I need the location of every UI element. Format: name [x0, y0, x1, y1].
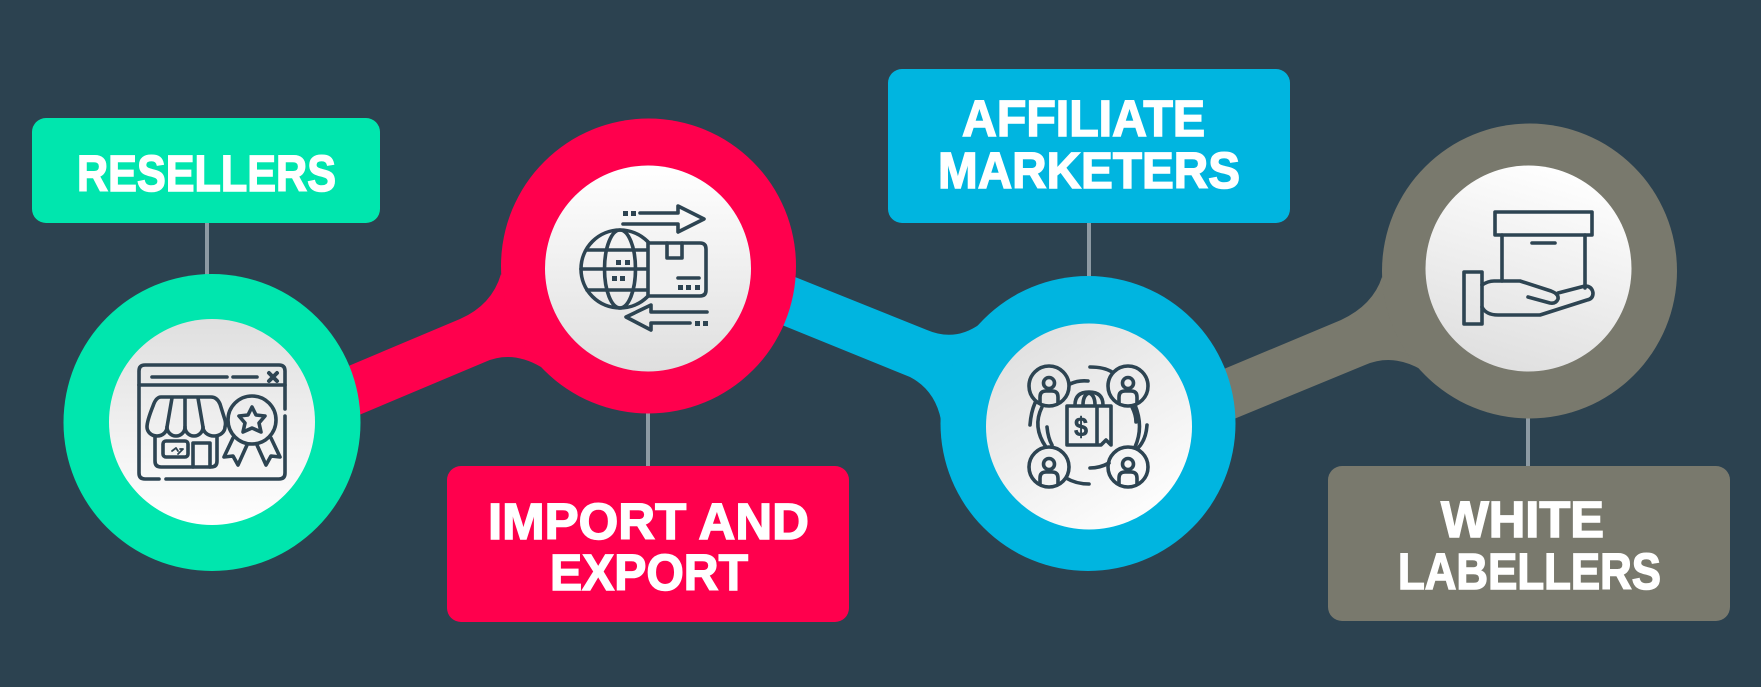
label: white labellers [1328, 466, 1730, 621]
icon: shopping bag with four customers: $ [1074, 412, 1088, 442]
label: white labellers: LABELLERS [1398, 543, 1661, 600]
connector stem: import and export [646, 410, 650, 470]
label: import and export [447, 466, 849, 622]
label: resellers [32, 118, 380, 223]
icon: hand holding box [1464, 212, 1593, 324]
connector stem: resellers [205, 220, 209, 280]
label: affiliate marketers: AFFILIATE [962, 90, 1205, 147]
node: white labellers [1200, 124, 1677, 433]
node: import and export [320, 118, 796, 423]
icon: shopping bag with four customers [1029, 366, 1148, 487]
connector stem: white labellers [1526, 410, 1530, 470]
label: import and export: IMPORT AND [488, 493, 809, 550]
icon: online store with award badge [139, 365, 285, 479]
label: affiliate marketers: MARKETERS [938, 142, 1240, 199]
connector stem: affiliate marketers [1087, 220, 1091, 280]
label: resellers: RESELLERS [77, 145, 336, 202]
label: affiliate marketers [888, 69, 1290, 223]
node: resellers [64, 274, 360, 571]
node: affiliate marketers [760, 263, 1236, 571]
label: import and export: EXPORT [550, 544, 748, 601]
label: white labellers: WHITE [1441, 491, 1604, 548]
icon: globe, parcel and arrows [581, 206, 708, 330]
